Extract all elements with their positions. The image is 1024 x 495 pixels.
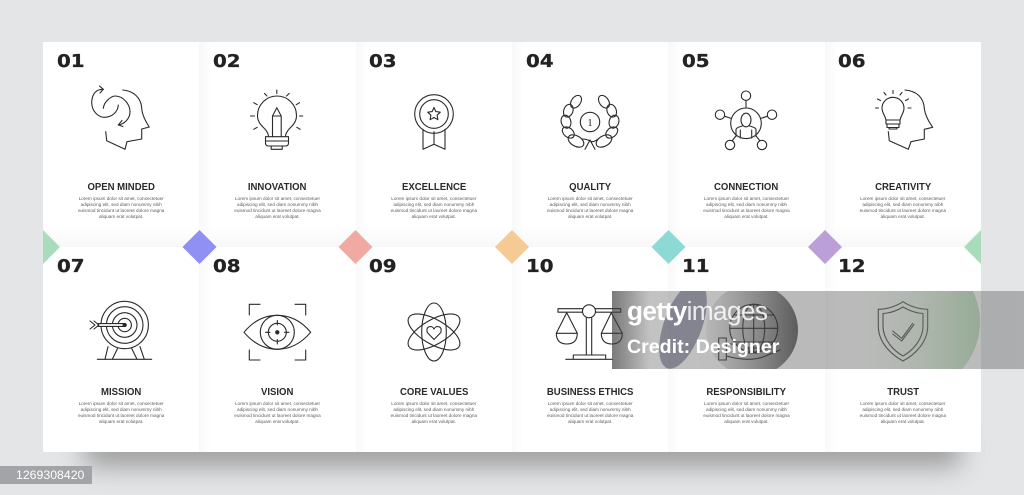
body text: adipiscing elit, sed diam nonummy nibh xyxy=(237,202,318,207)
body text: adipiscing elit, sed diam nonummy nibh xyxy=(706,407,787,412)
panel: 11 responsibility xyxy=(668,247,825,452)
step number 05: 05 xyxy=(682,50,709,72)
body text: adipiscing elit, sed diam nonummy nibh xyxy=(862,202,943,207)
body text: adipiscing elit, sed diam nonummy nibh xyxy=(237,407,318,412)
step number 02: 02 xyxy=(213,50,240,72)
body text: Lorem ipsum dolor sit amet, consectetuer xyxy=(704,401,789,406)
body text xyxy=(547,401,634,424)
icon: head with arrows xyxy=(91,85,150,150)
body text: aliquam erat volutpat. xyxy=(255,214,300,219)
panel: 03 excellence xyxy=(356,42,512,247)
body text: euismod tincidunt ut laoreet dolore magna xyxy=(234,208,321,213)
body text: aliquam erat volutpat. xyxy=(881,419,925,424)
body text xyxy=(390,196,478,219)
heading: BUSINESS ETHICS xyxy=(547,386,633,398)
panel: 07 mission xyxy=(43,247,199,452)
body text: Lorem ipsum dolor sit amet, consectetuer xyxy=(235,401,320,406)
icon: target with arrow xyxy=(90,300,152,360)
step number 06: 06 xyxy=(838,50,866,72)
icon: light bulb with pencil xyxy=(250,90,304,150)
body text: Lorem ipsum dolor sit amet, consectetuer xyxy=(860,401,945,406)
step number 12: 12 xyxy=(838,256,866,276)
body text: aliquam erat volutpat. xyxy=(724,214,769,219)
icon: balance scale xyxy=(556,304,623,360)
body text xyxy=(703,196,790,219)
body text: Lorem ipsum dolor sit amet, consectetuer xyxy=(704,196,789,201)
heading: RESPONSIBILITY xyxy=(707,386,786,398)
panel: 01 open minded xyxy=(43,42,199,247)
heading: CREATIVITY xyxy=(875,180,931,192)
icon: shield with check xyxy=(878,301,928,362)
body text: euismod tincidunt ut laoreet dolore magna xyxy=(78,413,164,418)
step number 01: 01 xyxy=(56,50,84,72)
body text: adipiscing elit, sed diam nonummy nibh xyxy=(550,202,631,207)
step number 11: 11 xyxy=(682,256,709,276)
heading: OPEN MINDED xyxy=(87,180,155,192)
body text: adipiscing elit, sed diam nonummy nibh xyxy=(550,407,631,412)
body text: euismod tincidunt ut laoreet dolore magna xyxy=(703,413,790,418)
icon: person network xyxy=(714,90,778,150)
body text xyxy=(860,401,946,424)
icon: head with light bulb xyxy=(875,90,934,150)
body text: euismod tincidunt ut laoreet dolore magna xyxy=(703,208,790,213)
body text: adipiscing elit, sed diam nonummy nibh xyxy=(393,202,474,207)
body text: Lorem ipsum dolor sit amet, consectetuer xyxy=(548,401,633,406)
panel: 02 innovation xyxy=(199,42,356,247)
watermark logo text: gettyimages xyxy=(627,296,767,326)
icon: medal with star xyxy=(414,94,454,150)
body text xyxy=(703,401,790,424)
image id tag xyxy=(0,466,92,484)
step number 09: 09 xyxy=(369,256,397,276)
heading: TRUST xyxy=(887,386,919,398)
panel: 06 creativity xyxy=(825,42,981,247)
body text xyxy=(234,401,321,424)
image id tag: 1269308420 xyxy=(16,468,84,482)
body text: euismod tincidunt ut laoreet dolore magna xyxy=(860,208,946,213)
body text xyxy=(547,196,634,219)
heading: QUALITY xyxy=(569,180,611,192)
body text: Lorem ipsum dolor sit amet, consectetuer xyxy=(79,196,164,201)
panel: 10 business ethics xyxy=(512,247,668,452)
body text: aliquam erat volutpat. xyxy=(568,419,612,424)
panel: 12 trust xyxy=(825,247,981,452)
body text: aliquam erat volutpat. xyxy=(724,419,769,424)
body text: Lorem ipsum dolor sit amet, consectetuer xyxy=(860,196,945,201)
main card xyxy=(43,42,981,452)
icon: atom with heart xyxy=(408,302,460,362)
step number 10: 10 xyxy=(526,256,553,276)
heading: CONNECTION xyxy=(714,180,779,192)
watermark credit: Credit: Designer xyxy=(627,336,779,358)
heading: VISION xyxy=(261,386,294,398)
body text: adipiscing elit, sed diam nonummy nibh xyxy=(81,407,162,412)
row connector diamonds xyxy=(43,230,981,264)
body text: euismod tincidunt ut laoreet dolore magna xyxy=(547,413,633,418)
body text: euismod tincidunt ut laoreet dolore magna xyxy=(547,208,633,213)
body text: aliquam erat volutpat. xyxy=(568,214,612,219)
drop shadow under card xyxy=(85,432,960,466)
body text: aliquam erat volutpat. xyxy=(881,214,925,219)
panel: 04 quality xyxy=(512,42,668,247)
icon: eye with crosshair xyxy=(243,304,312,360)
icon: hand holding globe xyxy=(718,304,780,360)
panel: 08 vision xyxy=(199,247,356,452)
body text: adipiscing elit, sed diam nonummy nibh xyxy=(862,407,943,412)
body text: euismod tincidunt ut laoreet dolore magna xyxy=(78,208,164,213)
body text xyxy=(234,196,321,219)
body text: aliquam erat volutpat. xyxy=(255,419,300,424)
body text: adipiscing elit, sed diam nonummy nibh xyxy=(81,202,162,207)
body text: adipiscing elit, sed diam nonummy nibh xyxy=(393,407,474,412)
body text: euismod tincidunt ut laoreet dolore magna xyxy=(391,413,477,418)
body text: Lorem ipsum dolor sit amet, consectetuer xyxy=(391,401,476,406)
body text xyxy=(78,196,164,219)
panel: 05 connection xyxy=(668,42,825,247)
body text: euismod tincidunt ut laoreet dolore magna xyxy=(391,208,477,213)
heading: CORE VALUES xyxy=(400,386,468,398)
body text xyxy=(390,401,478,424)
heading: INNOVATION xyxy=(248,180,307,192)
step number 03: 03 xyxy=(369,50,397,72)
body text: euismod tincidunt ut laoreet dolore magna xyxy=(234,413,321,418)
body text: Lorem ipsum dolor sit amet, consectetuer xyxy=(548,196,633,201)
body text: euismod tincidunt ut laoreet dolore magna xyxy=(860,413,946,418)
step number 07: 07 xyxy=(56,256,84,276)
heading: MISSION xyxy=(101,386,141,398)
step number 04: 04 xyxy=(526,50,553,72)
heading: EXCELLENCE xyxy=(402,180,466,192)
body text: Lorem ipsum dolor sit amet, consectetuer xyxy=(391,196,476,201)
body text: aliquam erat volutpat. xyxy=(412,214,456,219)
step number 08: 08 xyxy=(213,256,240,276)
body text: Lorem ipsum dolor sit amet, consectetuer xyxy=(235,196,320,201)
icon: laurel wreath: 1 xyxy=(587,117,593,129)
body text: aliquam erat volutpat. xyxy=(99,214,143,219)
body text xyxy=(78,401,164,424)
watermark banner xyxy=(612,291,1024,369)
body text: Lorem ipsum dolor sit amet, consectetuer xyxy=(79,401,164,406)
body text: adipiscing elit, sed diam nonummy nibh xyxy=(706,202,787,207)
icon: laurel wreath xyxy=(560,94,620,150)
body text: aliquam erat volutpat. xyxy=(99,419,143,424)
body text: aliquam erat volutpat. xyxy=(412,419,456,424)
panel: 09 core values xyxy=(356,247,512,452)
body text xyxy=(860,196,946,219)
